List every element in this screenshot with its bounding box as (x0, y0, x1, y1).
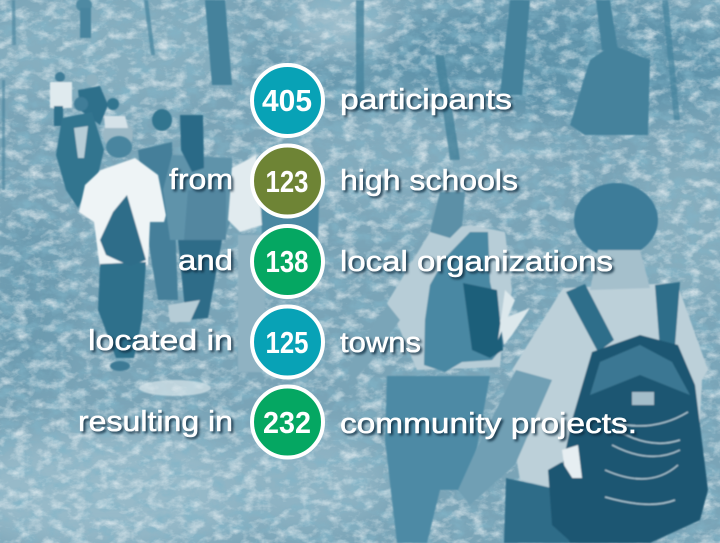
label: local organizations: local organizations (340, 246, 613, 278)
hiker with long dark hair (163, 115, 233, 322)
back group of hikers (50, 72, 133, 208)
label: located in: located in (88, 325, 233, 357)
hiker behind circles (228, 155, 320, 372)
hiker with grey shirt behind (138, 109, 178, 300)
middle hiker with backpack (348, 192, 530, 543)
circle: 123: 123 (266, 164, 308, 199)
circle: 405 (252, 65, 323, 136)
label: from: from (169, 164, 233, 196)
light patch on trail (139, 380, 211, 396)
label: high schools: high schools (340, 165, 518, 197)
circle: 125: 125 (266, 325, 308, 360)
label: community projects: community projects. (340, 408, 637, 440)
foreground hiker with large backpack (458, 183, 708, 543)
label: resulting in: resulting in (78, 406, 233, 438)
circle: 138 (252, 226, 323, 297)
label: towns: towns (340, 327, 421, 359)
circle: 123 (252, 146, 323, 216)
hiker in white shirt with drawstring bag (79, 136, 166, 371)
label: and: and (178, 245, 233, 277)
circle: 232 (252, 386, 323, 458)
tree trunks (2, 0, 680, 190)
distant hiker (76, 0, 92, 38)
circle: 138: 138 (266, 244, 308, 279)
circle: 125 (252, 306, 323, 378)
circle: 232: 232 (263, 405, 311, 440)
label: participants: participants (340, 84, 512, 116)
circle: 405: 405 (262, 83, 312, 118)
